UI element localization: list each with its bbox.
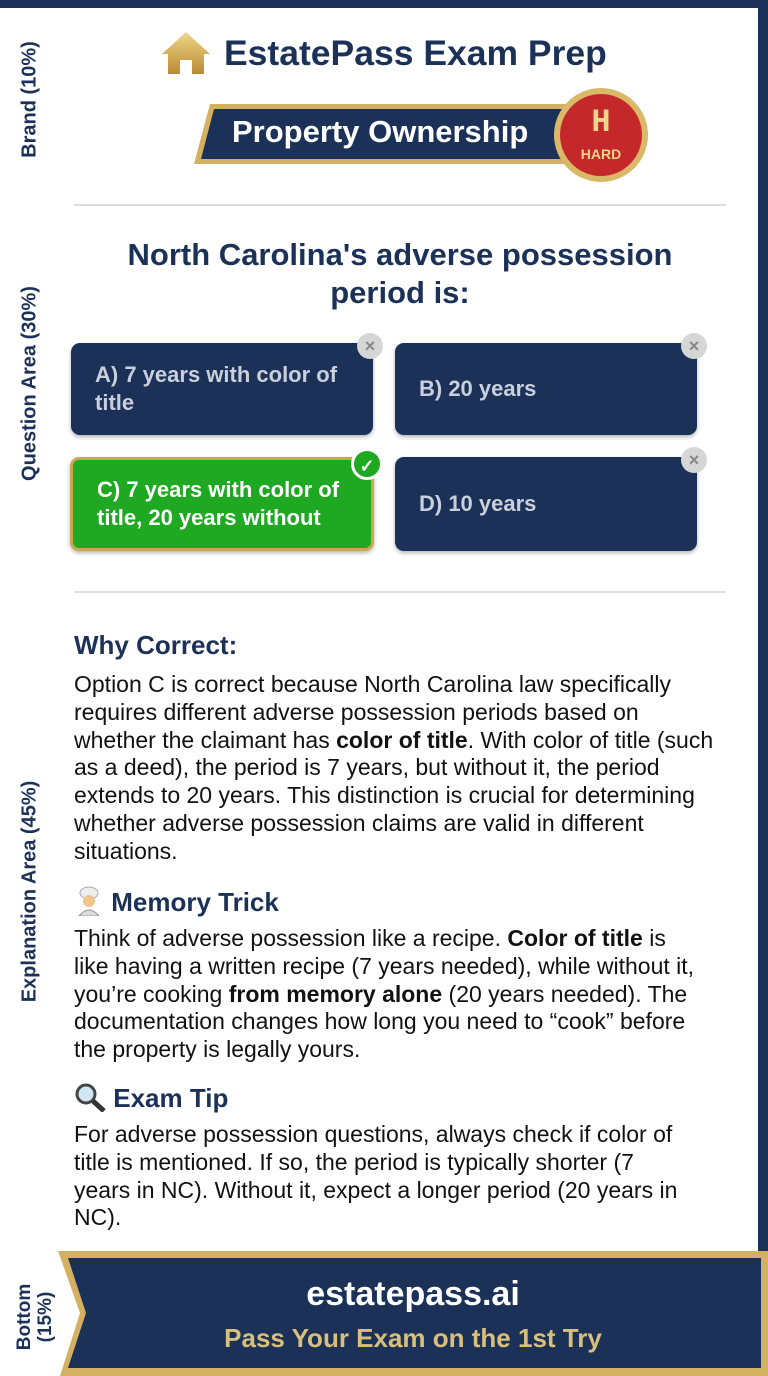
option B: × (689, 336, 699, 356)
option C correct: title, 20 years without (97, 505, 321, 530)
memory trick heading: Memory Trick (111, 887, 279, 917)
option C correct (70, 457, 374, 551)
option A: A) 7 years with color of (95, 362, 337, 387)
footer banner: estatepass.ai (306, 1275, 520, 1313)
option D (395, 457, 697, 551)
why correct text: whether adverse possession claims are valid in different (74, 810, 644, 836)
side label: bottom: Bottom (14, 1284, 35, 1350)
why correct text: requires different adverse possession periods based on (74, 699, 639, 725)
why correct text: as a deed), the period is 7 years, but without it, the period (74, 754, 660, 780)
exam tip text: For adverse possession questions, always check if color of (74, 1121, 672, 1147)
option A (71, 343, 373, 435)
memory trick text: like having a written recipe (7 years needed), while without it, (74, 953, 694, 979)
badge: hard: H (591, 104, 611, 141)
right border (758, 0, 768, 1256)
title: EstatePass Exam Prep (224, 33, 607, 73)
top border (0, 0, 768, 8)
brand header (162, 32, 607, 74)
option B (395, 343, 697, 435)
option C correct: C) 7 years with color of (97, 477, 339, 502)
exam tip text: NC). (74, 1204, 121, 1230)
why correct text: situations. (74, 838, 178, 864)
footer banner (58, 1251, 768, 1376)
option A: × (365, 336, 375, 356)
footer banner: Pass Your Exam on the 1st Try (224, 1323, 602, 1353)
side label: brand: Brand (10%) (18, 41, 40, 158)
topic banner: Property Ownership (232, 114, 528, 149)
why correct text: extends to 20 years. This distinction is crucial for determining (74, 782, 695, 808)
memory trick text: the property is legally yours. (74, 1036, 360, 1062)
icon: house (162, 32, 210, 74)
side label: question area: Question Area (30%) (18, 286, 40, 481)
question: North Carolina's adverse possession period is: (128, 237, 672, 310)
why correct heading: Why Correct: (74, 630, 237, 660)
why correct text (74, 671, 713, 864)
side label: explanation area: Explanation Area (45%) (18, 781, 40, 1002)
option D: D) 10 years (419, 491, 536, 516)
topic banner (194, 88, 648, 182)
memory trick text: Think of adverse possession like a recipe. Color of title is (74, 925, 666, 951)
exam tip text (74, 1121, 677, 1230)
why correct text: whether the claimant has color of title. With color of title (such (74, 727, 713, 753)
memory trick text (74, 925, 694, 1062)
exam tip heading: Exam Tip (113, 1083, 228, 1113)
exam tip text: title is mentioned. If so, the period is typically shorter (7 (74, 1149, 634, 1175)
side label: bottom (14, 1284, 56, 1350)
badge: hard: HARD (581, 146, 621, 162)
option B: B) 20 years (419, 376, 536, 401)
badge: hard (554, 88, 648, 182)
memory trick text: documentation changes how long you need to “cook” before (74, 1008, 685, 1034)
option D: × (689, 450, 699, 470)
option C correct: ✓ (359, 456, 375, 476)
exam tip text: years in NC). Without it, expect a longer period (20 years in (74, 1177, 677, 1203)
option A: title (95, 390, 134, 415)
memory trick text: you’re cooking from memory alone (20 years needed). The (74, 981, 687, 1007)
why correct text: Option C is correct because North Carolina law specifically (74, 671, 671, 697)
side label: bottom: (15%) (35, 1292, 56, 1342)
